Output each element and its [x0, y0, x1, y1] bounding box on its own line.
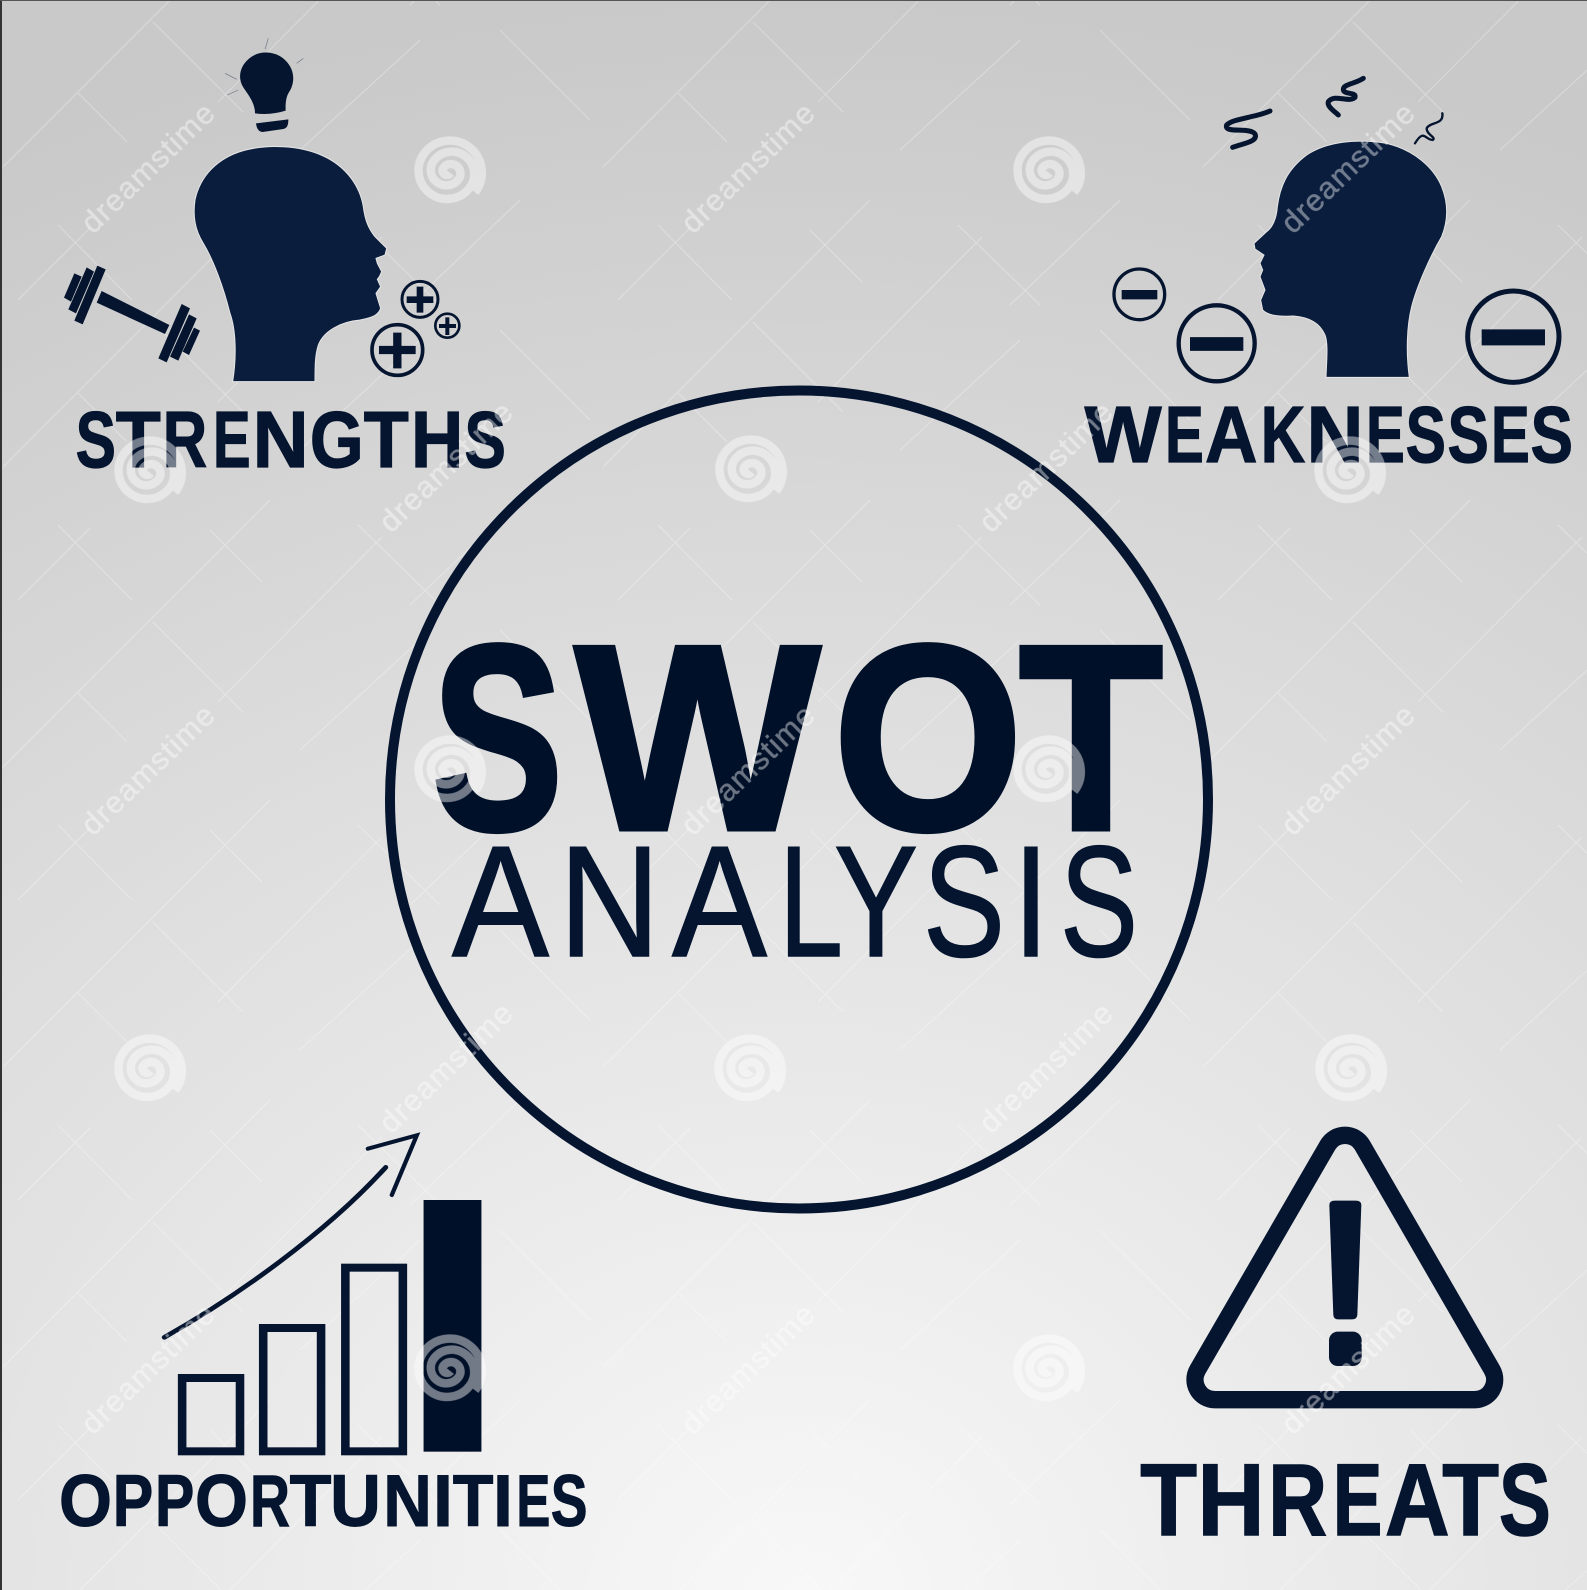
circle outline — [390, 390, 1208, 1208]
watermark: dreamstime text — [74, 95, 1422, 1441]
heading: strengths: H — [411, 395, 463, 484]
title: SWOT: O — [833, 590, 1023, 885]
subtitle: ANALYSIS: A — [452, 814, 550, 990]
icon: head silhouette — [194, 146, 387, 382]
arrow — [164, 1135, 417, 1337]
subtitle: ANALYSIS: Y — [834, 814, 918, 990]
watermark: dreamstime text: dreamstime — [1274, 1296, 1422, 1441]
bar 3 — [345, 1268, 403, 1451]
heading: opportunities: R — [250, 1461, 290, 1542]
exclamation mark — [1329, 1201, 1362, 1366]
heading: strengths: S — [464, 395, 506, 484]
heading: weaknesses: E — [1491, 390, 1530, 479]
heading: opportunities: O — [59, 1461, 112, 1542]
bar 2 — [263, 1328, 321, 1451]
icon: lightbulb — [225, 38, 303, 132]
subtitle: ANALYSIS: N — [559, 814, 660, 990]
heading: weaknesses: K — [1261, 390, 1305, 479]
panel: threats — [1140, 1135, 1551, 1557]
heading: opportunities: O — [195, 1461, 248, 1542]
icon: warning triangle — [1195, 1135, 1495, 1400]
heading: weaknesses: E — [1165, 390, 1204, 479]
heading: weaknesses: E — [1366, 390, 1405, 479]
heading: strengths: T — [364, 395, 409, 484]
subtitle: ANALYSIS: S — [923, 814, 1005, 990]
watermark: dreamstime text: dreamstime — [372, 394, 520, 539]
watermark: dreamstime text: dreamstime — [1274, 697, 1422, 842]
heading: threats: A — [1385, 1443, 1450, 1557]
heading: weaknesses: N — [1306, 390, 1364, 479]
heading: threats: H — [1198, 1443, 1264, 1557]
heading: weaknesses: S — [1530, 390, 1573, 479]
heading: strengths: T — [116, 395, 161, 484]
panel: opportunities — [59, 1135, 588, 1542]
watermark: spirals — [107, 128, 1396, 1413]
watermark: dreamstime text: dreamstime — [74, 1296, 222, 1441]
subtitle: ANALYSIS: A — [672, 814, 768, 990]
icon: minus signs — [1114, 269, 1559, 382]
heading: threats: T — [1140, 1443, 1197, 1557]
heading: threats: E — [1333, 1443, 1382, 1557]
heading: strengths: E — [213, 395, 251, 484]
watermark: dreamstime text: dreamstime — [1274, 95, 1422, 240]
title: SWOT: T — [1019, 590, 1163, 885]
heading: opportunities: N — [383, 1461, 432, 1542]
heading: opportunities: P — [113, 1461, 153, 1542]
heading: opportunities: P — [155, 1461, 194, 1542]
bar 1 — [182, 1378, 240, 1451]
panel: strengths — [64, 38, 506, 484]
icon: dumbbell — [64, 266, 200, 362]
heading: weaknesses: S — [1406, 390, 1446, 479]
watermark: dreamstime text: dreamstime — [372, 995, 520, 1140]
icon: head with squiggles and minus signs — [1114, 78, 1559, 382]
heading: opportunities: T — [290, 1461, 331, 1542]
triangle outline — [1195, 1135, 1495, 1400]
watermark: dreamstime text: dreamstime — [674, 95, 822, 240]
heading: opportunities: I — [433, 1461, 453, 1542]
heading: strengths: S — [76, 395, 116, 484]
watermark: dreamstime text: dreamstime — [674, 697, 822, 842]
watermark: dreamstime text: dreamstime — [972, 995, 1120, 1140]
heading: strengths: N — [253, 395, 309, 484]
heading: opportunities: T — [453, 1461, 493, 1542]
heading: opportunities: U — [330, 1461, 381, 1542]
heading: threats: T — [1442, 1443, 1499, 1557]
heading: threats: R — [1268, 1443, 1327, 1557]
heading: opportunities: E — [516, 1461, 550, 1542]
panel: weaknesses — [1085, 78, 1573, 479]
icon: head silhouette — [1254, 141, 1447, 377]
heading: strengths: G — [310, 395, 364, 484]
watermark: dreamstime text: dreamstime — [972, 394, 1120, 539]
watermark: dreamstime text: dreamstime — [674, 1296, 822, 1441]
subtitle: ANALYSIS: S — [1060, 814, 1138, 990]
heading: opportunities: I — [493, 1461, 513, 1542]
title: SWOT: W — [575, 590, 822, 885]
heading: opportunities: S — [551, 1461, 588, 1542]
heading: weaknesses: W — [1085, 390, 1162, 479]
panel: swot analysis centre — [390, 390, 1208, 1208]
watermark: dreamstime text: dreamstime — [74, 95, 222, 240]
heading: weaknesses: A — [1205, 390, 1258, 479]
icon: head with lightbulb, dumbbell and plus signs — [64, 38, 459, 382]
subtitle: ANALYSIS: L — [779, 814, 843, 990]
bar chart with rising arrow — [164, 1135, 481, 1452]
icon: squiggles — [1226, 78, 1442, 147]
heading: strengths: R — [163, 395, 207, 484]
watermark: dreamstime text: dreamstime — [74, 697, 222, 842]
heading: threats: S — [1499, 1443, 1551, 1557]
bar 4 — [424, 1200, 481, 1452]
icon: plus signs — [372, 281, 459, 375]
subtitle: ANALYSIS: I — [1013, 814, 1049, 990]
title: SWOT: S — [432, 590, 563, 885]
heading: weaknesses: S — [1448, 390, 1489, 479]
